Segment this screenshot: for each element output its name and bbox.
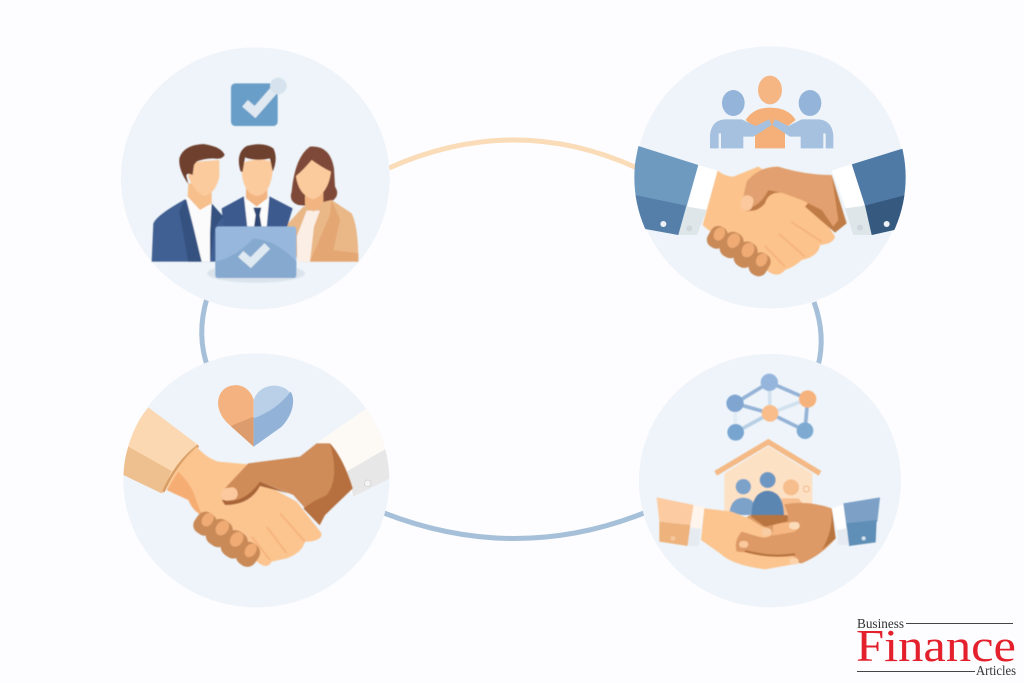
circle background <box>123 353 389 607</box>
circle background <box>121 47 390 309</box>
right sleeve <box>832 497 880 546</box>
man left <box>152 144 225 262</box>
left sleeve <box>120 407 198 493</box>
man middle <box>222 144 293 228</box>
icon: handshake <box>167 443 353 571</box>
right sleeve <box>832 148 908 235</box>
three colleagues <box>152 144 358 262</box>
logo word: Articles: Articles <box>976 664 1016 679</box>
icon: heart <box>218 385 293 447</box>
icon: clasped hands <box>701 503 836 569</box>
circle background <box>636 46 904 308</box>
left sleeve <box>632 146 718 235</box>
icon: three people <box>710 76 833 148</box>
panel: partnership handshake <box>632 46 908 308</box>
icon: handshake <box>703 167 847 279</box>
icon: network <box>726 374 816 441</box>
panel: team approval <box>121 47 390 309</box>
logo word: Finance: Finance <box>856 620 1016 671</box>
panel: trust handshake with heart <box>120 353 393 607</box>
icon: laptop <box>207 226 305 283</box>
icon: checkbox <box>231 78 287 126</box>
logo: Business Finance Articles <box>856 617 1016 679</box>
right sleeve <box>318 408 393 497</box>
woman <box>287 147 358 262</box>
icon: house with family <box>716 442 820 520</box>
left sleeve <box>657 497 705 546</box>
panel: community and network <box>639 354 901 607</box>
circle background <box>639 354 901 607</box>
connector arcs <box>202 140 821 538</box>
logo word: Business: Business <box>857 617 904 632</box>
